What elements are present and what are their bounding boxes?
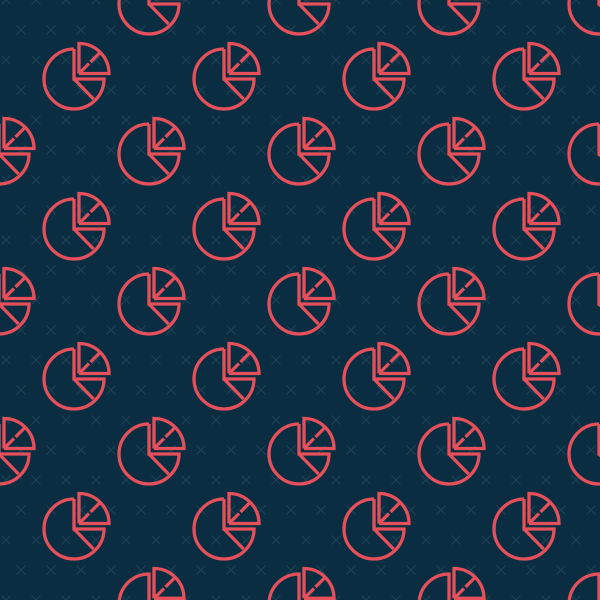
icon row 6 <box>44 344 559 409</box>
icon row 5 <box>0 266 600 336</box>
icon row 2 <box>44 43 559 109</box>
icon row 9 <box>119 568 600 600</box>
icon row 3 <box>0 116 600 186</box>
icon row 7 <box>0 416 600 486</box>
icon row 4 <box>44 194 559 259</box>
icon row 8 <box>44 494 559 559</box>
icon row 1 <box>117 0 600 36</box>
